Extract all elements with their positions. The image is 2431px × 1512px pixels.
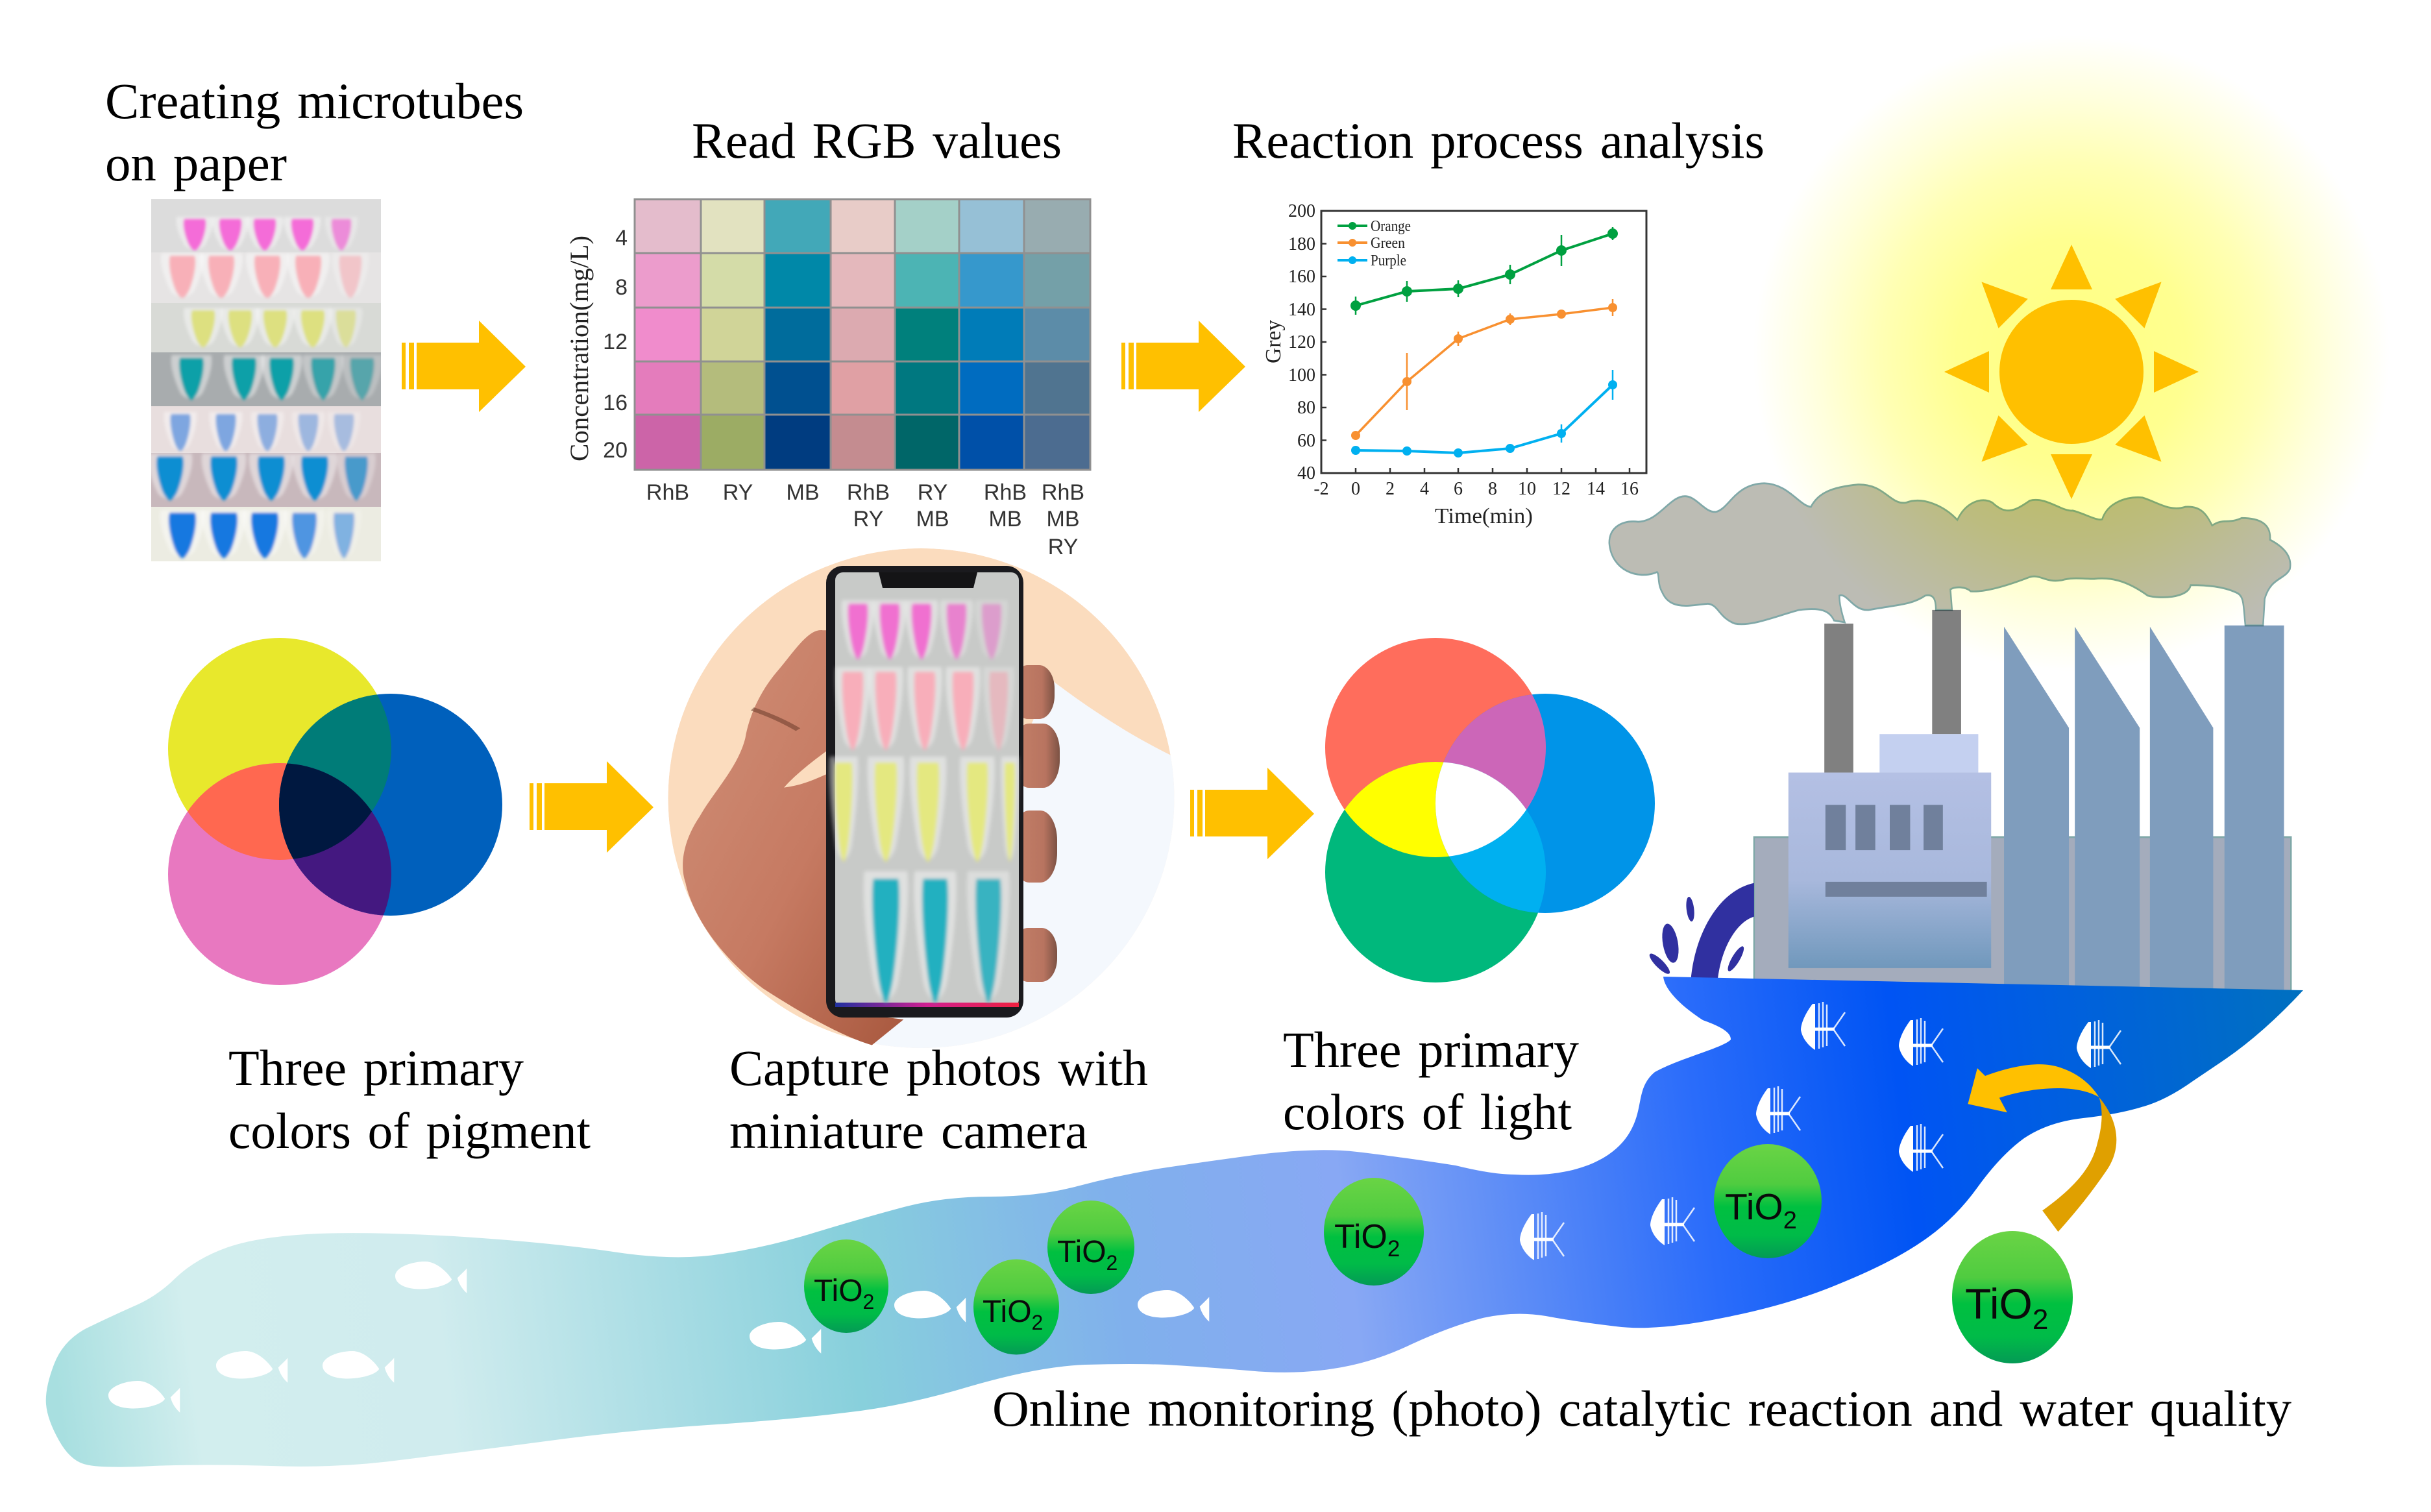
main building — [1789, 773, 1991, 968]
circle background — [668, 548, 1178, 1056]
TiO2 particle 3: TiO — [1057, 1235, 1106, 1269]
axis titles: Time(min) — [1435, 504, 1533, 528]
arrow: RGB to chart — [1121, 321, 1245, 412]
heatmap x axis: MB — [916, 507, 949, 531]
y tick labels: 180 — [1288, 234, 1315, 254]
line chart: grey vs time — [1262, 201, 1646, 528]
x tick labels — [1313, 479, 1639, 499]
arrow: pigment to camera — [530, 761, 654, 853]
heatmap x axis: RhB — [1042, 480, 1084, 505]
y tick labels: 120 — [1288, 332, 1315, 352]
heatmap x axis — [646, 480, 1084, 559]
TiO2 particle 4 — [1324, 1178, 1424, 1286]
series: green legend (orange line) — [1351, 299, 1617, 440]
heading: read RGB values: Read RGB values — [692, 112, 1062, 169]
series: orange legend (green line) — [1350, 227, 1618, 315]
x tick labels: 10 — [1518, 479, 1536, 499]
curved arrow: TiO2 into water — [1968, 1064, 2116, 1232]
heatmap y axis: Concentration(mg/L) — [565, 236, 594, 461]
x tick labels: -2 — [1313, 479, 1329, 499]
x tick labels: 12 — [1552, 479, 1570, 499]
white fish — [108, 1262, 1209, 1413]
hand — [683, 630, 1060, 1045]
caption: three primary colors of light: Three primary — [1283, 1021, 1579, 1078]
TiO2 particle 2: TiO — [983, 1295, 1032, 1329]
x tick labels: 16 — [1620, 479, 1639, 499]
y tick labels: 200 — [1288, 201, 1315, 221]
heading: reaction process analysis: Reaction process analysis — [1232, 112, 1765, 169]
chimneys — [1824, 610, 1961, 773]
heatmap y axis: 20 — [603, 438, 628, 463]
heatmap x axis: RY — [723, 480, 753, 505]
heatmap y axis: 8 — [615, 275, 628, 300]
y tick labels: 100 — [1288, 365, 1315, 385]
legend: Purple — [1371, 252, 1406, 269]
phone — [826, 566, 1023, 1018]
TiO2 particle 2 — [973, 1259, 1059, 1355]
y tick labels: 140 — [1288, 300, 1315, 320]
photo: microtubes on paper — [148, 199, 382, 561]
smoke cloud — [1609, 483, 2290, 626]
heatmap y axis — [565, 226, 628, 463]
axis titles: Grey — [1262, 320, 1286, 363]
caption: capture photos: miniature camera — [729, 1103, 1088, 1159]
heatmap y axis: 12 — [603, 330, 628, 354]
heatmap x axis: RY — [853, 507, 883, 531]
y tick labels: 80 — [1297, 398, 1315, 418]
TiO2 particle 5: TiO — [1725, 1186, 1783, 1228]
heading: creating microtubes: on paper — [105, 135, 287, 191]
heatmap x axis: RhB — [646, 480, 689, 505]
TiO2 particle 6: 2 — [2033, 1304, 2048, 1335]
heatmap: RGB values — [635, 199, 1090, 470]
heatmap x axis: MB — [989, 507, 1021, 531]
caption: three primary colors of light: colors of light — [1283, 1084, 1572, 1140]
x tick labels: 4 — [1420, 479, 1429, 499]
factory base — [1754, 837, 2291, 992]
TiO2 particle 1: 2 — [863, 1290, 874, 1313]
venn: three primary colors of pigment — [168, 638, 502, 985]
river — [46, 977, 2303, 1467]
heatmap x axis: RY — [918, 480, 947, 505]
x tick labels: 0 — [1351, 479, 1360, 499]
x tick labels: 14 — [1587, 479, 1605, 499]
heatmap x axis: RhB — [847, 480, 890, 505]
legend: Green — [1371, 235, 1405, 252]
x tick labels: 2 — [1386, 479, 1395, 499]
caption: capture photos — [729, 1040, 1148, 1159]
sawtooth sheds and stack — [2004, 626, 2284, 992]
TiO2 particle 3: 2 — [1106, 1251, 1118, 1274]
icon: sun — [1944, 245, 2199, 499]
y tick labels: 60 — [1297, 431, 1315, 451]
series: purple legend (blue line) — [1351, 370, 1617, 457]
TiO2 particle 1 — [804, 1239, 888, 1333]
heatmap x axis: MB — [1046, 507, 1080, 531]
arrow: microtubes to RGB — [402, 321, 526, 412]
TiO2 particle 5: 2 — [1783, 1207, 1797, 1234]
TiO2 particle 4: 2 — [1387, 1236, 1400, 1262]
heatmap x axis: RhB — [984, 480, 1027, 505]
x tick labels: 8 — [1488, 479, 1497, 499]
heatmap y axis: 16 — [603, 391, 628, 415]
phone photo in circle — [668, 548, 1178, 1056]
sun glow — [1753, 36, 2389, 672]
discharge pipe and splashes — [1648, 883, 1754, 981]
caption: three primary colors of pigment — [228, 1040, 591, 1159]
heatmap y axis: 4 — [615, 226, 628, 250]
heading: creating microtubes: Creating microtubes — [105, 73, 524, 129]
TiO2 particle 6: TiO — [1965, 1280, 2033, 1328]
TiO2 particle 3 — [1047, 1201, 1134, 1294]
TiO2 particle 1: TiO — [814, 1274, 863, 1308]
x tick labels: 6 — [1454, 479, 1463, 499]
heatmap x axis: RY — [1048, 535, 1078, 559]
heading: creating microtubes — [105, 73, 524, 191]
axis titles — [1262, 320, 1533, 528]
TiO2 particle 5 — [1714, 1144, 1822, 1258]
legend — [1338, 218, 1411, 269]
TiO2 particle 6 — [1952, 1231, 2073, 1363]
caption: three primary colors of light — [1283, 1021, 1579, 1140]
factory — [1609, 483, 2291, 992]
caption: capture photos: Capture photos with — [729, 1040, 1148, 1096]
TiO2 particle 4: TiO — [1334, 1218, 1387, 1256]
caption: three primary colors of pigment: colors of pigment — [228, 1103, 591, 1159]
y tick labels — [1288, 201, 1315, 483]
legend: Orange — [1371, 218, 1411, 235]
caption: online monitoring: Online monitoring (photo) catalytic reaction and water quality — [992, 1380, 2291, 1437]
heatmap x axis: MB — [787, 480, 819, 505]
roof block — [1879, 734, 1978, 773]
caption: three primary colors of pigment: Three primary — [228, 1040, 524, 1096]
y tick labels: 160 — [1288, 267, 1315, 287]
TiO2 particle 2: 2 — [1032, 1311, 1043, 1334]
y tick labels: 40 — [1297, 463, 1315, 483]
venn: three primary colors of light — [1325, 638, 1655, 982]
fish skeletons — [1520, 1002, 2121, 1260]
arrow: camera to light — [1190, 768, 1314, 859]
